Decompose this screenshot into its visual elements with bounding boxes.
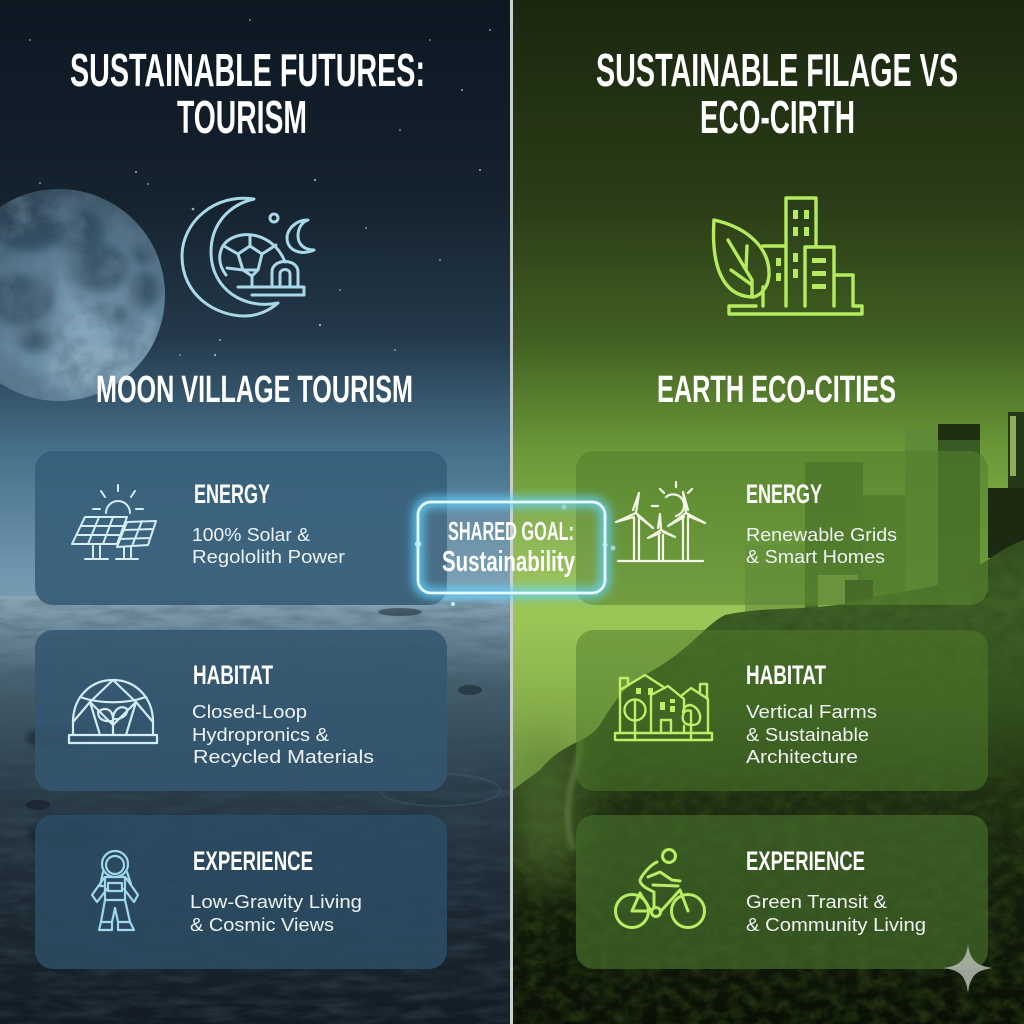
panel: eco-city habitat xyxy=(576,630,988,791)
icon: wind turbines xyxy=(616,482,705,561)
heading: habitat: HABITAT xyxy=(193,660,273,690)
heading: moon village tourism: MOON VILLAGE TOURISM xyxy=(96,369,413,411)
divider xyxy=(510,0,513,1024)
heading: energy: ENERGY xyxy=(194,479,270,509)
text: habitat: Vertical Farms xyxy=(746,701,877,722)
callout: shared goal xyxy=(415,502,616,606)
heading: earth eco-cities: EARTH ECO-CITIES xyxy=(657,369,896,411)
panel: eco-city experience xyxy=(576,815,988,969)
heading: experience: EXPERIENCE xyxy=(746,846,865,876)
text: energy xyxy=(192,524,345,567)
text: energy: Regololith Power xyxy=(192,546,345,567)
panel: eco-city background xyxy=(507,0,1024,1024)
title: left xyxy=(70,44,425,143)
text: experience: Green Transit & xyxy=(746,891,888,912)
buildings xyxy=(745,412,1024,618)
text: habitat xyxy=(746,701,877,767)
text: experience: Low-Grawity Living xyxy=(190,891,362,912)
icon: houses xyxy=(615,675,712,740)
callout: shared goal: Sustainability xyxy=(442,546,575,578)
text: energy: & Smart Homes xyxy=(746,546,885,567)
panel: moon experience xyxy=(35,815,447,969)
heading: energy: ENERGY xyxy=(746,479,822,509)
text: habitat: & Sustainable xyxy=(746,724,869,745)
trees xyxy=(513,515,1024,1024)
text: habitat: Closed-Loop xyxy=(192,701,307,722)
text: experience xyxy=(746,891,926,935)
title: right xyxy=(596,44,958,143)
icon: solar panels xyxy=(72,485,156,559)
heading: experience: EXPERIENCE xyxy=(193,846,313,876)
panel: eco-city energy xyxy=(576,451,988,605)
icon: leaf and city xyxy=(714,198,862,314)
title: left: TOURISM xyxy=(177,91,307,143)
icon: cyclist xyxy=(616,850,704,928)
icon: moon village xyxy=(182,198,314,316)
icon: dome xyxy=(69,680,157,743)
panel: moon habitat xyxy=(35,630,447,791)
text: habitat xyxy=(192,701,374,767)
icon: sparkle xyxy=(943,944,993,993)
text: energy: 100% Solar & xyxy=(192,524,311,545)
text: habitat: Hydropronics & xyxy=(192,724,330,745)
text: experience xyxy=(190,891,362,935)
text: habitat: Recycled Materials xyxy=(193,746,374,767)
title: right: ECO-CIRTH xyxy=(700,91,855,143)
illustration: moon xyxy=(0,189,165,401)
heading: habitat: HABITAT xyxy=(746,660,826,690)
title: left: SUSTAINABLE FUTURES: xyxy=(70,44,425,96)
text: experience: & Cosmic Views xyxy=(190,914,334,935)
text: energy xyxy=(746,524,897,567)
text: experience: & Community Living xyxy=(746,914,926,935)
panel: moon background xyxy=(0,0,511,1024)
panel: moon energy xyxy=(35,451,447,605)
callout: shared goal: SHARED GOAL: xyxy=(448,516,574,546)
valley and road xyxy=(507,720,583,890)
text: energy: Renewable Grids xyxy=(746,524,897,545)
icon: astronaut xyxy=(92,851,138,930)
text: habitat: Architecture xyxy=(746,746,858,767)
